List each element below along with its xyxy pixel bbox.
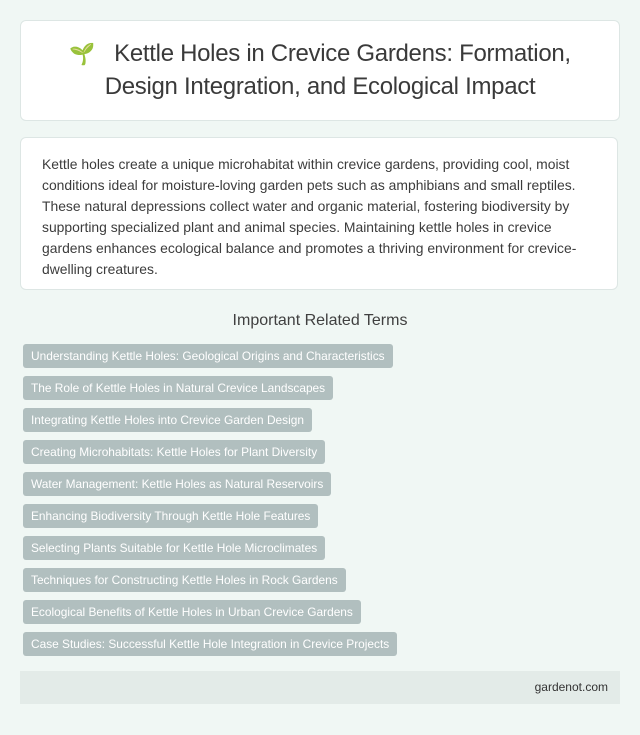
tag list: The Role of Kettle Holes in Natural Crevice Landscapes [31,381,325,395]
title: Design Integration, and Ecological Impact [105,73,535,100]
tag list: Case Studies: Successful Kettle Hole Integration in Crevice Projects [31,637,389,651]
tag list: Understanding Kettle Holes: Geological Origins and Characteristics [31,349,385,363]
tag list: Enhancing Biodiversity Through Kettle Hole Features [31,509,310,523]
tag list: Water Management: Kettle Holes as Natural Reservoirs [31,477,323,491]
footer: gardenot.com [535,680,608,694]
heading: related terms: Important Related Terms [233,312,407,329]
footer [20,671,620,704]
tag list: Creating Microhabitats: Kettle Holes for Plant Diversity [31,445,317,459]
title [20,20,620,121]
title: 🌱 Kettle Holes in Crevice Gardens: Formation, [69,40,571,67]
tag list: Selecting Plants Suitable for Kettle Hole Microclimates [31,541,317,555]
description text: Kettle holes create a unique microhabitat within crevice gardens, providing cool, moist conditions ideal for moisture-loving garden pets such as amphibians and small reptiles. These natural depressions collect water and organic material, fostering biodiversity by supporting specialized plant and animal species. Maintaining kettle holes in crevice gardens enhances ecological balance and promotes a thriving environment for crevice-dwelling creatures. [42,156,576,277]
tag list: Techniques for Constructing Kettle Holes in Rock Gardens [31,573,338,587]
tag list: Ecological Benefits of Kettle Holes in Urban Crevice Gardens [31,605,353,619]
tag list: Integrating Kettle Holes into Crevice Garden Design [31,413,304,427]
tag list [23,344,397,656]
